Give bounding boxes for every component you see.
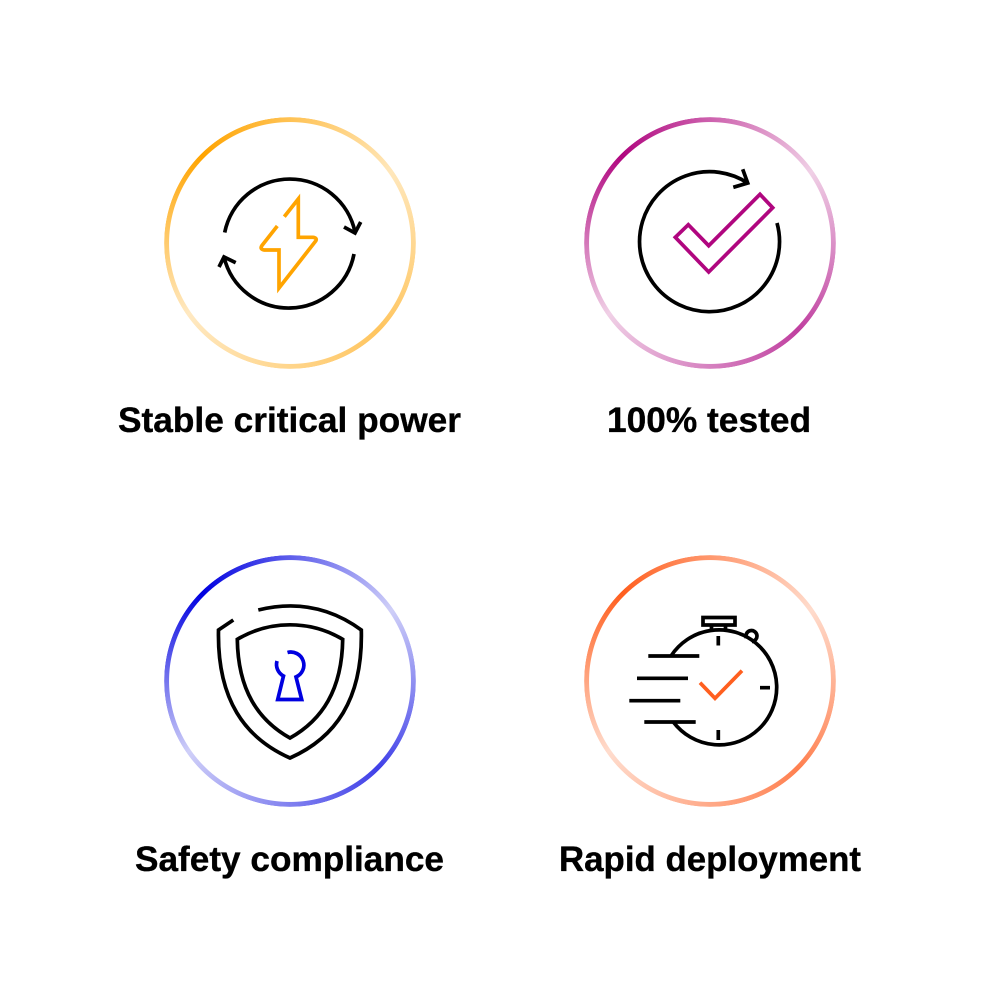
ring: blue gradient [164,555,416,807]
ring: orange-red gradient [584,555,836,807]
icon part: shield outlines [218,606,361,758]
icon part: stopwatch [671,618,777,745]
icon part: lightning bolt [261,199,316,288]
label: Safety compliance [135,840,444,879]
icon: check mark in circular arrow [607,168,811,440]
ring: magenta gradient [584,116,836,368]
icon: shield with keyhole [135,604,444,879]
icon part: cycle arrows [219,179,361,308]
panel: safety compliance [135,555,444,879]
panel: rapid deployment [559,555,861,879]
icon: power cycle with lightning bolt [118,177,461,440]
panel: 100% tested [584,117,836,440]
ring: orange gradient [164,117,416,369]
label: 100% tested [607,401,811,440]
panel: stable critical power [118,117,461,440]
icon: stopwatch with speed lines [559,616,861,879]
icon part: check mark [675,194,773,272]
icon part: check mark [700,671,742,698]
icon part: speed lines [629,656,699,722]
label: Rapid deployment [559,840,861,879]
label: Stable critical power [118,401,461,440]
icon part: keyhole [277,652,304,700]
icon part: circular arrow [640,169,780,312]
